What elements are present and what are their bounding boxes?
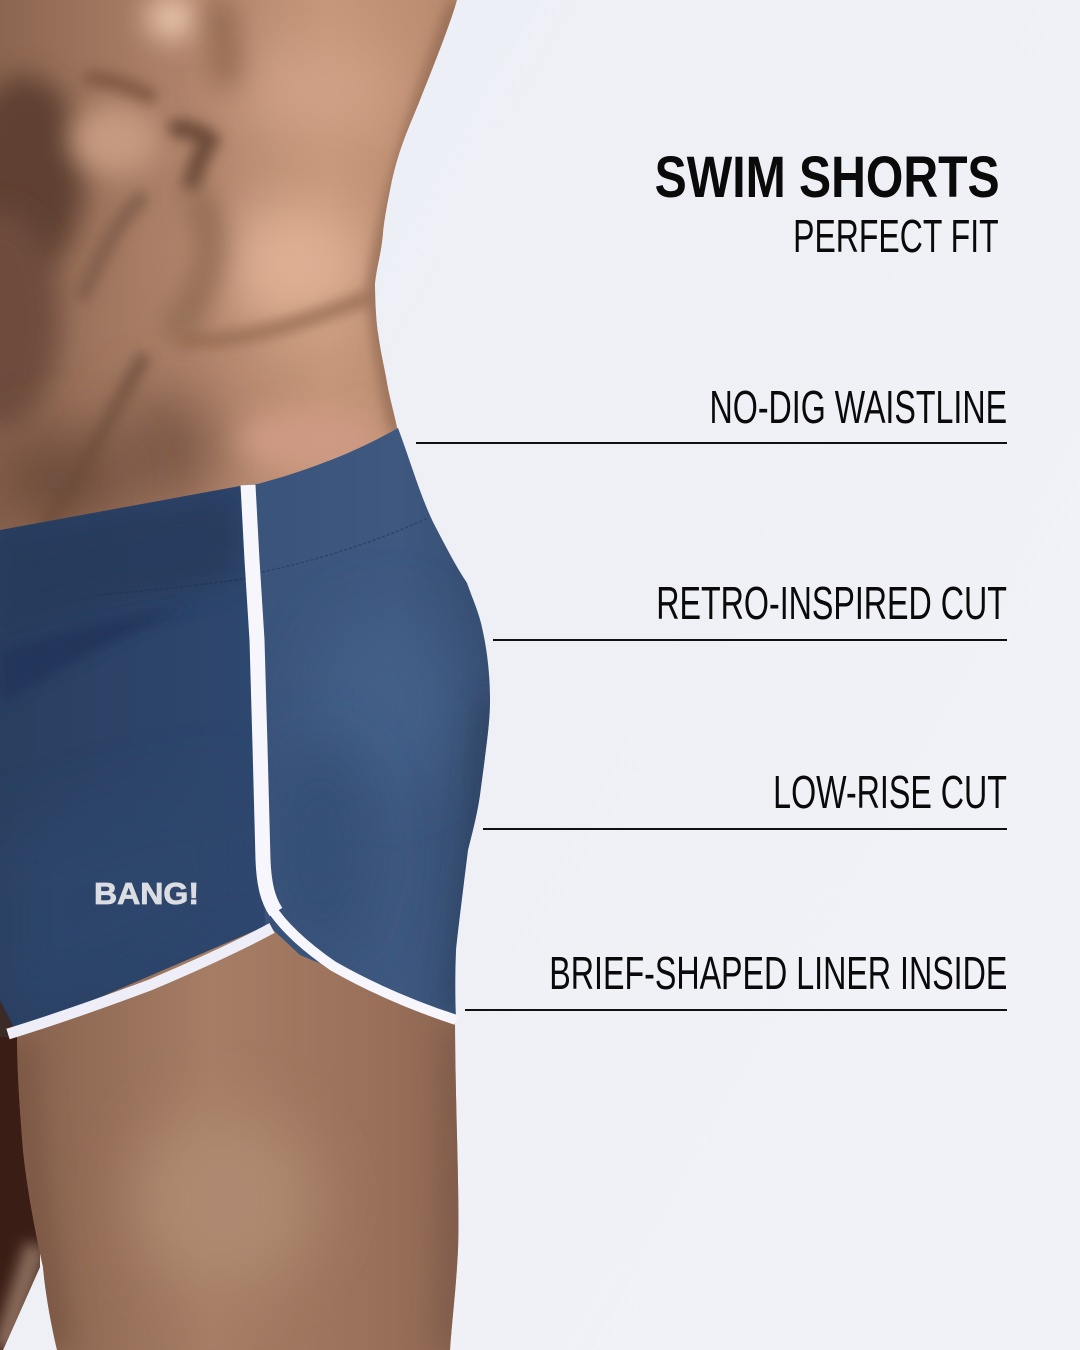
torso — [0, 0, 470, 540]
photo: model wearing navy swim shorts — [0, 0, 490, 1350]
highlights — [146, 0, 198, 40]
title: SWIM SHORTS — [655, 145, 1000, 210]
callout: brief-shaped liner inside: BRIEF-SHAPED LINER INSIDE — [549, 947, 1007, 999]
thigh — [0, 920, 470, 1350]
subtitle: PERFECT FIT — [794, 210, 999, 262]
side panel — [250, 428, 490, 1014]
logo: BANG! — [94, 876, 199, 911]
front panel — [0, 478, 280, 1037]
white piping — [248, 485, 276, 912]
callout: no-dig waistline: NO-DIG WAISTLINE — [709, 381, 1007, 433]
callout: retro-inspired cut: RETRO-INSPIRED CUT — [656, 577, 1007, 629]
chest hair shadow — [0, 75, 85, 275]
rear leg — [0, 1036, 40, 1350]
callout: low-rise cut: LOW-RISE CUT — [773, 766, 1007, 818]
muscle creases — [85, 78, 155, 98]
swim shorts — [0, 420, 500, 1050]
